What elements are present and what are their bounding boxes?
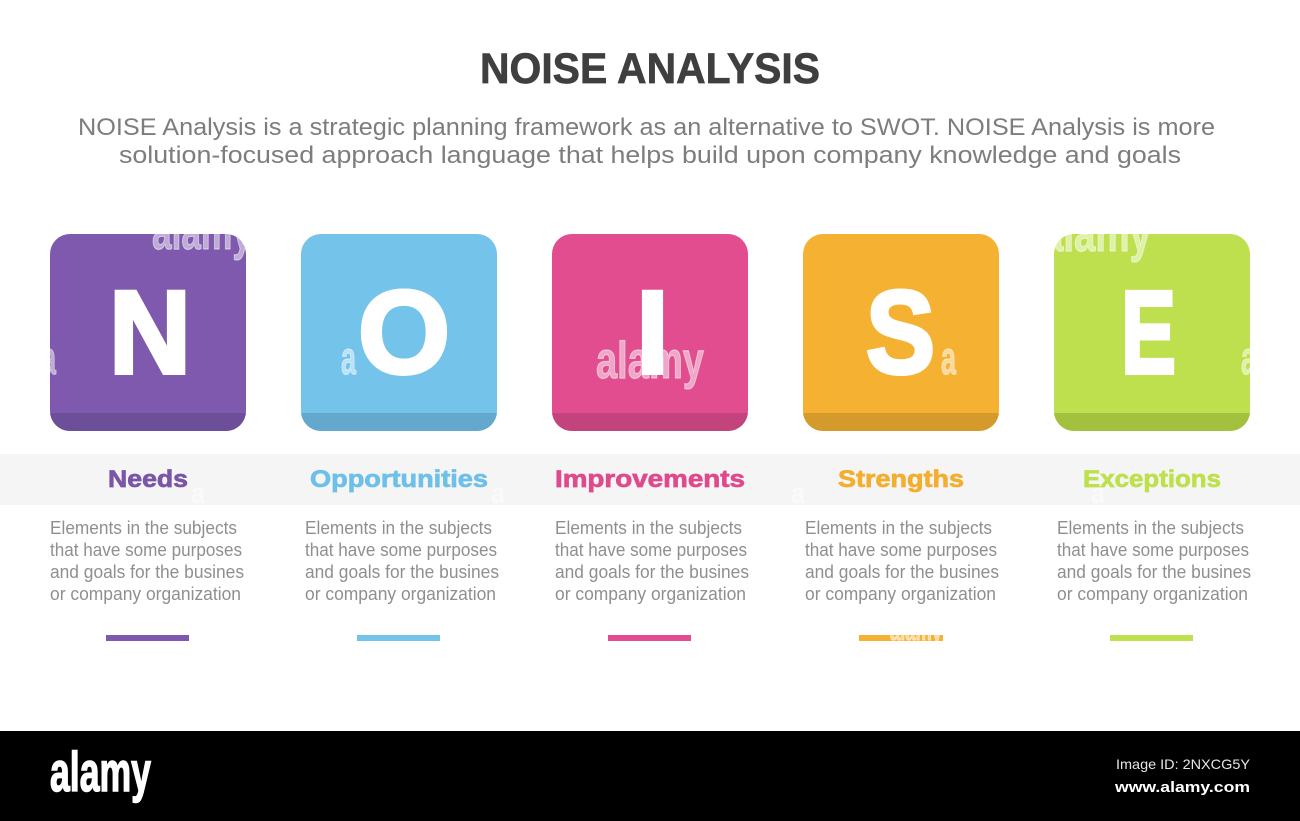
icon: letter N tile: a <box>42 332 56 384</box>
text block: Needs: that have some purposes <box>50 540 242 560</box>
text block: Exceptions: and goals for the busines <box>1057 562 1251 582</box>
panel: Needs <box>50 234 246 641</box>
accent bar: Opportunities <box>357 635 440 641</box>
icon: letter E tile: a <box>1241 332 1256 384</box>
watermark marks on band: a <box>191 477 205 510</box>
text block: Improvements: or company organization <box>555 584 746 604</box>
title: NOISE ANALYSIS <box>480 45 820 93</box>
accent bar: Strengths <box>859 635 943 641</box>
icon: letter N tile <box>50 234 246 431</box>
panel: Opportunities <box>301 234 499 641</box>
accent bar: Strengths: alamy <box>890 615 942 646</box>
icon: letter N tile: alamy <box>152 203 252 261</box>
text block: Improvements: that have some purposes <box>555 540 747 560</box>
icon: letter I tile: alamy <box>596 332 704 390</box>
website: www.alamy.com <box>1114 779 1250 796</box>
icon: letter E tile: E <box>1121 267 1176 399</box>
text block: Strengths: that have some purposes <box>805 540 997 560</box>
watermark marks on band: a <box>1091 477 1105 510</box>
text block: Needs: Elements in the subjects <box>50 518 237 538</box>
heading: Improvements: Improvements <box>555 466 745 493</box>
text block: Needs: or company organization <box>50 584 241 604</box>
icon: letter E tile: alamy <box>1042 205 1151 263</box>
icon: letter O tile: a <box>341 332 356 384</box>
text block: Opportunities: and goals for the busines <box>305 562 499 582</box>
icon: letter I tile <box>552 234 748 431</box>
label band background <box>0 454 1300 505</box>
text block: Exceptions: or company organization <box>1057 584 1248 604</box>
image ID: Image ID: 2NXCG5Y <box>1116 756 1251 772</box>
panel: Exceptions <box>1054 234 1250 641</box>
text block: Improvements: and goals for the busines <box>555 562 749 582</box>
watermark marks on band: a <box>491 477 505 510</box>
icon: letter N tile: N <box>109 267 191 399</box>
icon: letter O tile: O <box>358 267 450 399</box>
text block: Strengths: or company organization <box>805 584 996 604</box>
subtitle text <box>78 114 1215 169</box>
footer logo: alamy <box>50 740 151 803</box>
text block: Strengths: and goals for the busines <box>805 562 999 582</box>
panel: Improvements <box>552 234 749 641</box>
text block: Improvements <box>555 518 749 604</box>
text block: Strengths: Elements in the subjects <box>805 518 992 538</box>
subtitle text: solution-focused approach language that helps build upon company knowledge and goals <box>119 142 1181 169</box>
panel: Strengths <box>803 234 999 646</box>
text block: Improvements: Elements in the subjects <box>555 518 742 538</box>
icon: letter S tile <box>803 234 999 431</box>
text block: Opportunities: or company organization <box>305 584 496 604</box>
text block: Needs: and goals for the busines <box>50 562 244 582</box>
text block: Opportunities: that have some purposes <box>305 540 497 560</box>
subtitle text: NOISE Analysis is a strategic planning framework as an alternative to SWOT. NOISE Analysis is more <box>78 114 1215 141</box>
text block: Exceptions <box>1057 518 1251 604</box>
watermark marks on band: a <box>791 477 805 510</box>
footer bar <box>0 731 1300 821</box>
text block: Needs <box>50 518 244 604</box>
icon: letter I tile: I <box>636 267 669 399</box>
text block: Exceptions: Elements in the subjects <box>1057 518 1244 538</box>
icon: letter E tile <box>1054 234 1250 431</box>
text block: Opportunities <box>305 518 499 604</box>
heading: Needs: Needs <box>108 466 188 493</box>
icon: letter S tile: a <box>941 332 956 384</box>
accent bar: Improvements <box>608 635 691 641</box>
icon: letter S tile: S <box>866 267 935 399</box>
text block: Opportunities: Elements in the subjects <box>305 518 492 538</box>
text block: Exceptions: that have some purposes <box>1057 540 1249 560</box>
accent bar: Needs <box>106 635 189 641</box>
heading: Strengths: Strengths <box>838 466 964 493</box>
heading: Exceptions: Exceptions <box>1083 466 1221 493</box>
heading: Opportunities: Opportunities <box>310 466 488 493</box>
text block: Strengths <box>805 518 999 604</box>
accent bar: Exceptions <box>1110 635 1193 641</box>
icon: letter O tile <box>301 234 497 431</box>
watermark marks on band <box>191 477 1105 510</box>
